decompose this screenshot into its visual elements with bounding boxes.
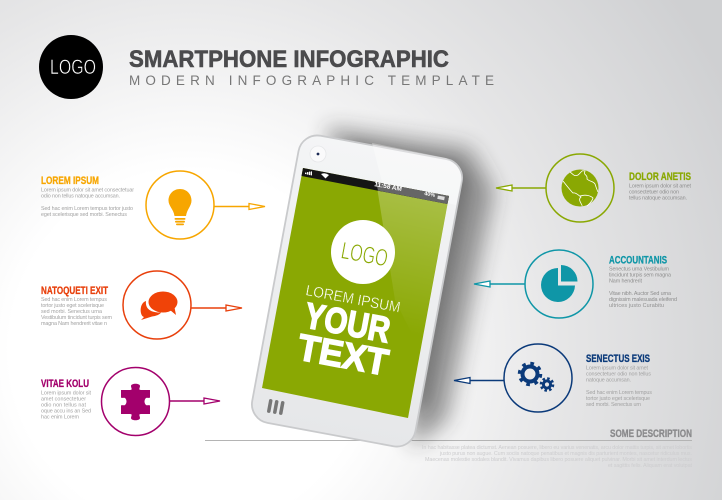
phone body — [249, 132, 465, 450]
body text: ultrices justo Curabitu — [609, 303, 664, 309]
screen tagline: LOREM IPSUM — [304, 282, 402, 316]
icon: pie chart — [541, 265, 578, 302]
description block — [422, 428, 692, 469]
camera — [310, 146, 326, 162]
description text: justo purus non augue. Cum sociis natoque penatibus et magnis dis parturient montes, nascetur ridiculus mus. — [439, 451, 692, 457]
body text: Sed hac enim Lorem tempus tortor justo — [41, 206, 133, 212]
circle with arrow — [454, 344, 572, 412]
body text: dignissim malesuada eleifend — [609, 297, 677, 303]
body text: Lorem ipsum dolor sit amet — [629, 184, 692, 190]
body text: consectetuer odio non tellus — [586, 372, 651, 378]
body text: Lorem ipsum dolor sit amet — [586, 366, 648, 372]
description text: Maecenas molestie sodales blandit. Vivamus dapibus libero posuere aliquet pulvinar. Morbi sit amet interdum lectus — [425, 457, 692, 463]
description heading: SOME DESCRIPTION — [610, 428, 692, 440]
heading: ACCOUNTANIS — [609, 254, 667, 266]
body text: Nam hendrerit — [609, 278, 642, 284]
circle with arrow — [102, 368, 220, 436]
header logo: LOGO — [50, 56, 96, 79]
body text: odio non tellus natoque accumsan. — [41, 194, 120, 200]
body text: sed morbi. Senectus urna — [41, 309, 102, 315]
body text: Vitae nibh. Auctor Sed urna — [609, 291, 671, 297]
body text — [41, 188, 134, 218]
body text — [41, 297, 112, 327]
body text: tortor justo eget scelerisque — [586, 396, 650, 402]
body text — [609, 266, 677, 309]
circle with arrow — [123, 271, 242, 339]
body text: odio non tellus nat — [41, 402, 86, 408]
phone shadow — [325, 127, 494, 447]
description text — [422, 445, 692, 469]
circle with arrow — [146, 171, 265, 239]
body text: Lorem ipsum dolor sit — [41, 390, 92, 396]
item: vitae kolu — [41, 368, 220, 436]
body text — [629, 184, 692, 202]
screen logo badge — [331, 220, 395, 284]
body text: consectetuer odio non — [629, 190, 679, 196]
screen headline your: YOUR — [302, 295, 394, 351]
subtitle: MODERN INFOGRAPHIC TEMPLATE — [129, 73, 494, 88]
item: senectus exis — [454, 344, 652, 412]
body text: Sed hac enim Lorem tempus — [586, 390, 652, 396]
item: natoqueti exit — [41, 271, 242, 339]
body text: Lorem ipsum dolor sit amet consectetuar — [41, 188, 134, 194]
body text: Senectus urna Vestibulum — [609, 266, 670, 272]
item: lorem ipsum — [41, 171, 265, 239]
body text: hac enim Lorem — [41, 414, 80, 420]
body text: tortor justo eget scelerisque — [41, 303, 104, 309]
icon: puzzle piece — [121, 384, 150, 420]
icon: light bulb — [168, 189, 192, 225]
phone top glare — [372, 143, 462, 205]
item: dolor anetis — [496, 154, 692, 222]
description text: In hac habitasse platea dictumst. Aenean posuere, libero eu varius venenatis, arcu dolor mattis turpis, sit amet lobortis — [422, 445, 692, 451]
icon: globe — [562, 170, 598, 206]
screen headline text: TEXT — [295, 327, 392, 384]
icon: gears — [520, 364, 553, 390]
heading: SENECTUS EXIS — [586, 353, 650, 365]
heading: DOLOR ANETIS — [629, 171, 691, 183]
body text: eget scelerisque sed morbi. Senectus — [41, 212, 127, 218]
body text: tincidunt turpis sem magna — [609, 272, 671, 278]
baseline rule — [205, 440, 692, 441]
icon: speech bubbles — [141, 292, 178, 320]
body text: sed morbi. Senectus urn — [586, 402, 641, 408]
body text: amet consectetuer — [41, 396, 86, 402]
body text: magna Nam hendrerit vitae n — [41, 321, 107, 327]
smartphone — [249, 132, 465, 450]
status bar: 40% — [424, 191, 436, 199]
header logo — [39, 35, 103, 99]
body text — [41, 390, 92, 420]
screen logo badge: LOGO — [339, 237, 390, 272]
speaker grille — [267, 399, 285, 415]
screen glare — [376, 181, 449, 350]
item: accountanis — [474, 250, 677, 318]
heading: LOREM IPSUM — [41, 175, 99, 187]
body text: Vestibulum tincidunt turpis sem — [41, 315, 112, 321]
body text: oque accu ins an Sed — [41, 408, 91, 414]
circle with arrow — [496, 154, 614, 222]
heading: NATOQUETI EXIT — [41, 285, 108, 297]
body text: Sed hac enim Lorem tempus — [41, 297, 107, 303]
status bar: 11:58 AM — [374, 181, 402, 193]
body text: natoque accumsan. — [586, 378, 631, 384]
status bar — [302, 168, 449, 204]
body text: tellus natoque accumsan. — [629, 196, 687, 202]
description text: et sagittis felis. Aliquam erat volutpat — [608, 463, 692, 469]
screen — [262, 168, 449, 418]
circle with arrow — [474, 250, 593, 318]
title: SMARTPHONE INFOGRAPHIC — [129, 46, 449, 73]
body text — [586, 366, 652, 408]
heading: VITAE KOLU — [41, 378, 89, 390]
